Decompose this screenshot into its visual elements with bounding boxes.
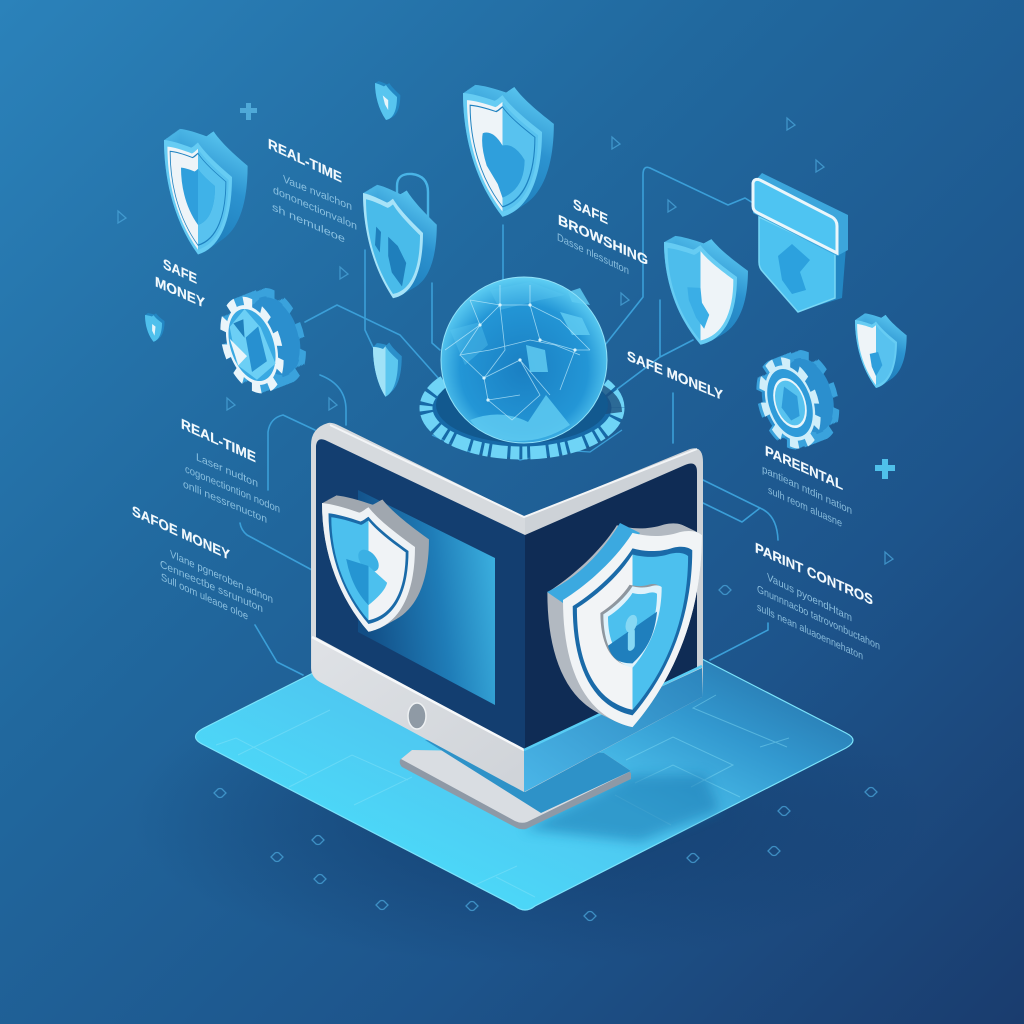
shield on left screen (322, 471, 429, 660)
label: Safoe Money: Vlane pgneroben adnon (170, 548, 273, 606)
continents (450, 282, 590, 441)
label: Parental (762, 444, 852, 530)
platform shadow (130, 665, 930, 965)
label: Safe Browsing: Dasse nlessutton (557, 231, 629, 277)
large shield on right screen (547, 485, 702, 767)
connector lines (240, 167, 778, 675)
inner shield (600, 570, 662, 683)
globe sphere (441, 277, 607, 443)
label: Safoe Money: Sull oom uleaoe oloe (161, 571, 248, 623)
bezel highlight (330, 425, 697, 517)
monitor stand (400, 740, 720, 842)
label: Safe Money left: MONEY (155, 275, 205, 312)
icon: plus right (875, 459, 895, 479)
label: Parint Contros: PARINT CONTROS (755, 541, 873, 609)
left screen (316, 439, 525, 750)
small shield: top (375, 74, 400, 129)
label: Safe Money centre: SAFE MONELY (627, 348, 723, 404)
label: Real-Time top: dononectionvalon (273, 184, 357, 233)
label: Safe Money left (155, 257, 205, 312)
small shield: centre (373, 334, 402, 405)
monitor right face bezel (525, 448, 703, 792)
label: Real-Time top: REAL-TIME (268, 137, 342, 187)
label: Safe Money left: SAFE (163, 257, 197, 288)
screen window (358, 490, 495, 705)
label: Real-Time top: Vaue nvalchon (283, 173, 352, 213)
shield: right centre (664, 216, 748, 367)
lock shackle (397, 174, 428, 230)
label: Real-Time lower: Laser nudton (196, 451, 258, 490)
label: Real-Time lower (181, 417, 280, 526)
gear: left (223, 270, 303, 411)
label: Parint Contros (755, 541, 880, 663)
stand shadow (524, 775, 720, 842)
label: Safoe Money: Cenneectbe ssrunuton (160, 558, 263, 615)
left chin (312, 637, 524, 792)
platform circuit lines (216, 695, 789, 897)
right chin (524, 668, 702, 792)
shield badge: upper right (753, 173, 848, 312)
base outline (432, 430, 622, 460)
label: Real-Time lower: REAL-TIME (181, 417, 256, 466)
network lines (445, 285, 590, 420)
platform (196, 570, 853, 910)
right screen (525, 464, 697, 750)
gear: right (759, 334, 836, 466)
shield: far right small (855, 299, 907, 404)
icon: plus top left (240, 103, 257, 120)
label: Parint Contros: Gnunnnacbo tatrovonbuctahon (757, 583, 880, 653)
label: Parint Contros: sulls nean aluaoennehaton (757, 601, 863, 663)
label: Safoe Money (132, 504, 273, 623)
shield: top left large (164, 104, 248, 282)
label: Parental: pantiean ntdin nation (762, 463, 852, 517)
label: Safe Browsing: BROWSHING (558, 213, 648, 269)
label: Real-Time lower: cogonectiontion nodon (185, 463, 280, 516)
monitor (311, 423, 703, 792)
monitor left face bezel (311, 423, 525, 792)
label: Safe Browsing: SAFE (573, 197, 608, 228)
shield blue top edge (547, 523, 640, 603)
shield: top centre (463, 62, 554, 242)
power button (408, 703, 426, 729)
base ring (420, 358, 624, 458)
label: Parint Contros: Vauus pyoendHtam (767, 571, 852, 624)
label: Real-Time top: sh nemuleoe (272, 201, 345, 246)
label: Parental: PAREENTAL (765, 444, 843, 494)
label: Parental: sulh reom aluasne (768, 484, 842, 530)
label: Safe Browsing (557, 197, 648, 277)
globe on holographic base (420, 277, 624, 460)
label: Real-Time lower: onlli nessrenucton (183, 478, 267, 526)
lock (363, 161, 437, 327)
decorative small triangles and dots (118, 118, 893, 920)
small shield: left (145, 308, 165, 347)
label: Safoe Money: SAFOE MONEY (132, 504, 230, 564)
label: Real-Time top (268, 137, 357, 246)
